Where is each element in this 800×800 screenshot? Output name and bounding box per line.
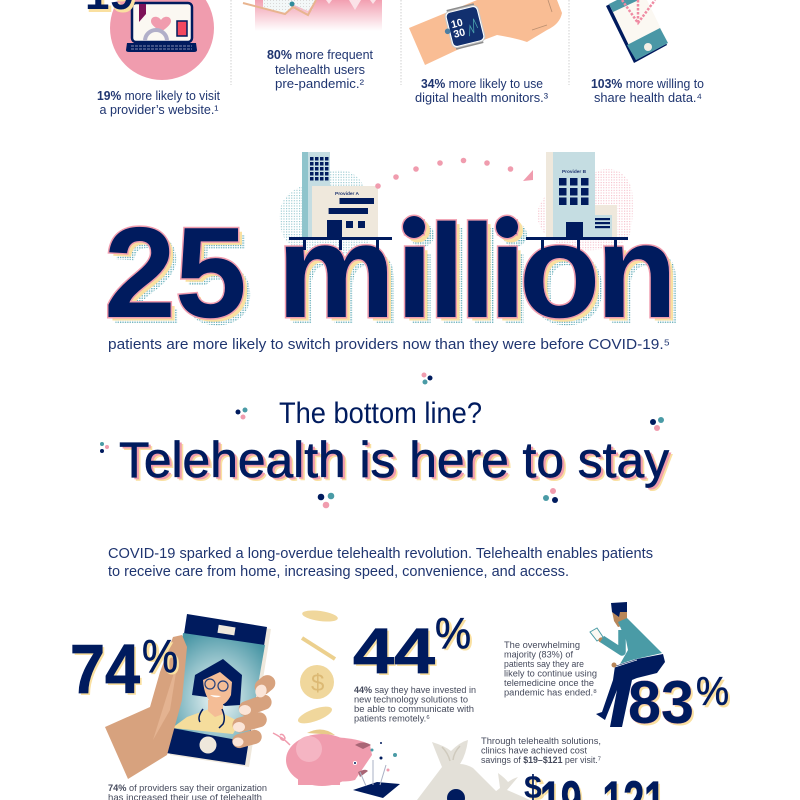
caption: savings	[481, 736, 601, 766]
big number: 25 million	[104, 198, 684, 353]
stat: 74%: %	[142, 630, 178, 682]
caption: website	[97, 89, 221, 117]
panel: 44% invested	[273, 609, 476, 798]
heading: telehealth is here to stay: Telehealth is here to stay	[122, 434, 672, 490]
panel: 83% continue	[504, 602, 731, 738]
platform tables	[289, 237, 628, 250]
caption: website: 19% more likely to visit	[97, 89, 221, 103]
decorative dot clusters	[100, 372, 664, 508]
icon: dotted blobs	[279, 169, 633, 255]
stat: 83%: %	[696, 670, 729, 714]
dotted shadow layer: million	[284, 205, 684, 353]
caption: savings: Through telehealth solutions,	[481, 736, 601, 747]
caption: frequency: telehealth users	[275, 63, 365, 77]
pink outline layer: million	[277, 198, 677, 346]
caption: 44%: new technology solutions to	[354, 694, 468, 706]
heading: the bottom line: The bottom line?	[279, 397, 482, 430]
pink outline layer: 25	[104, 201, 247, 345]
stat: 44%: %	[437, 611, 473, 660]
stat: 74%: 74	[70, 630, 140, 708]
icon: tablet with sparks	[353, 742, 400, 798]
caption: 83%: patients say they are	[504, 659, 584, 670]
dotted shadow layer	[111, 205, 684, 353]
icon: wrist with smartwatch	[409, 0, 562, 65]
caption: website: a provider’s website.¹	[100, 103, 218, 117]
intro paragraph: to receive care from home, increasing speed, convenience, and access.	[108, 563, 569, 580]
caption: 83%: majority (83%) of	[504, 650, 573, 660]
stat: 44%: 44	[355, 617, 437, 689]
headline numerals	[104, 198, 677, 346]
doctor	[172, 659, 242, 734]
panel: data sharing stat	[591, 0, 704, 105]
icon: laptop on pink circle	[85, 0, 214, 80]
caption: frequency	[267, 48, 374, 91]
caption: savings: savings of $19–$121 per visit.⁷	[481, 755, 601, 766]
caption: monitors: 34% more likely to use	[421, 77, 543, 91]
chart: line over pink area	[243, 0, 382, 31]
dotted shadow layer: 25	[111, 208, 254, 352]
caption: 83%: The overwhelming	[504, 640, 580, 651]
caption: 83%: telemedicine once the	[504, 678, 594, 689]
caption: 83%	[504, 640, 597, 698]
stat: 74%: %	[144, 632, 180, 684]
icon: dotted arc arrow	[375, 158, 533, 189]
headline numerals: 25	[104, 201, 247, 345]
yellow shadow layer: 25	[108, 204, 251, 348]
illustration: switching providers	[279, 152, 633, 255]
icon: phone with doctor held in hand	[105, 614, 279, 779]
stat: savings range	[524, 769, 667, 800]
stat: 74%: 74	[72, 632, 142, 710]
icon: piggy bank	[273, 729, 372, 786]
icon: falling coins: $	[311, 670, 324, 697]
panel: cost savings	[417, 736, 667, 800]
caption: 44%: 44% say they have invested in	[354, 685, 476, 696]
intro paragraph: COVID-19 sparked a long-overdue telehealth revolution. Telehealth enables patients	[108, 545, 653, 562]
yellow shadow layer: million	[281, 202, 681, 350]
caption: data sharing: 103% more willing to	[591, 77, 704, 91]
headline numerals: million	[277, 198, 677, 346]
caption: 74%	[108, 783, 267, 800]
heading: telehealth is here to stay: Telehealth is here to stay	[123, 436, 673, 492]
yellow shadow layer	[108, 202, 681, 350]
panel: digital monitor stat	[409, 0, 562, 105]
icon: man sitting with phone	[590, 602, 665, 727]
caption: frequency: pre-pandemic.²	[275, 77, 364, 91]
caption: 83%: pandemic has ended.⁸	[504, 688, 597, 698]
stat: 83%: 83	[628, 669, 694, 736]
stat: 83%: %	[698, 672, 731, 716]
stat: 83%	[628, 669, 731, 738]
caption: data sharing	[591, 77, 704, 105]
icon: building Provider B	[546, 152, 617, 237]
caption: monitors: digital health monitors.³	[415, 91, 548, 105]
stat: 44%	[353, 609, 473, 689]
stat: 44%: %	[435, 609, 471, 658]
panel: telehealth frequency stat	[243, 0, 382, 91]
panel: 74% providers	[70, 614, 279, 800]
caption: 83%: likely to continue using	[504, 668, 597, 680]
caption: 44%: patients remotely.⁶	[354, 714, 430, 724]
caption: savings: clinics have achieved cost	[481, 746, 587, 756]
icon: wrist with smartwatch: 10	[450, 17, 464, 31]
pink outline layer	[104, 198, 677, 346]
caption: 44%	[354, 685, 476, 724]
caption: data sharing: share health data.⁴	[594, 91, 702, 105]
stat: 44%: 44	[353, 615, 435, 687]
caption: monitors	[415, 77, 548, 105]
heading: telehealth is here to stay: Telehealth is here to stay	[119, 432, 669, 488]
icon: falling coins	[296, 609, 339, 727]
icon: building Provider A	[302, 152, 378, 237]
icon: tilted smartphone	[606, 0, 668, 63]
stat: 74%	[70, 630, 180, 710]
caption: frequency: 80% more frequent	[267, 48, 374, 62]
subhead: 25 million caption: patients are more likely to switch providers now than they were before COVID-19.⁵	[108, 336, 670, 353]
caption: 74%: 74% of providers say their organization	[108, 783, 267, 794]
panel: website stat	[85, 0, 221, 117]
icon: building Provider B: Provider B	[562, 169, 587, 174]
caption: 44%: be able to communicate with	[354, 704, 474, 715]
icon: wrist with smartwatch: 30	[452, 26, 467, 41]
divider lines	[231, 0, 569, 85]
icon: building Provider A: Provider A	[335, 191, 360, 196]
intro paragraph	[108, 545, 653, 580]
icon: money bags	[417, 740, 530, 800]
stat: 83%: 83	[630, 671, 696, 738]
fingers	[231, 672, 279, 750]
